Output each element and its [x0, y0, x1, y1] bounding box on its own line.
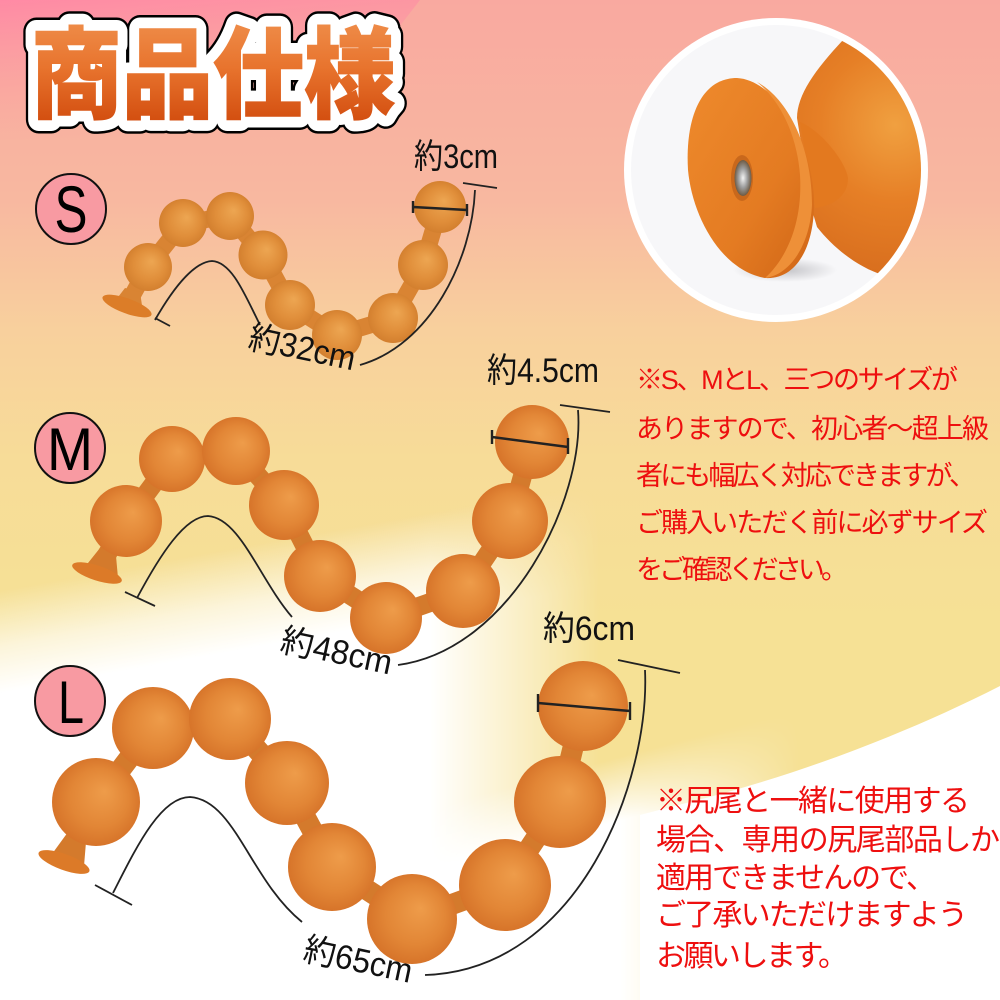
badge: L: L: [58, 669, 84, 736]
note: size guidance: ありますので、初心者〜超上級: [636, 414, 989, 444]
note: tail parts: 適用できませんので、: [656, 862, 936, 895]
dimension lines: M: [125, 405, 610, 665]
label: 約48cm: 約48cm: [277, 622, 396, 682]
badge: M: [35, 413, 105, 483]
photo: suction cup close-up: [624, 18, 960, 322]
note: size guidance: 者にも幅広く対応できますが、: [636, 461, 976, 491]
note: tail parts: [656, 785, 1000, 973]
badge: M: M: [47, 416, 93, 483]
note: size guidance: をご確認ください。: [636, 555, 848, 585]
note: tail parts: 場合、専用の尻尾部品しか: [656, 824, 1000, 857]
note: size guidance: ※S、MとL、三つのサイズが: [636, 365, 958, 395]
product: L size beads: [36, 661, 628, 964]
product: M size beads: [70, 405, 569, 654]
product: S size beads: [100, 181, 466, 360]
note: tail parts: お願いします。: [656, 940, 848, 973]
badge: S: S: [54, 172, 88, 246]
label: 約65cm: 約65cm: [300, 931, 416, 991]
dimension lines: S: [155, 183, 497, 365]
label: 約3cm: 約3cm: [414, 138, 498, 176]
label: 約6cm: 約6cm: [543, 610, 635, 648]
note: size guidance: [636, 365, 989, 585]
badge: L: [35, 666, 105, 736]
note: tail parts: ※尻尾と一緒に使用する: [656, 785, 970, 818]
label: 約32cm: 約32cm: [245, 319, 359, 378]
note: size guidance: ご購入いただく前に必ずサイズ: [636, 508, 988, 538]
label: 約4.5cm: 約4.5cm: [487, 352, 599, 390]
badge: S: [36, 172, 106, 246]
dimension lines: L: [95, 660, 680, 975]
note: tail parts: ご了承いただけますよう: [656, 899, 968, 932]
